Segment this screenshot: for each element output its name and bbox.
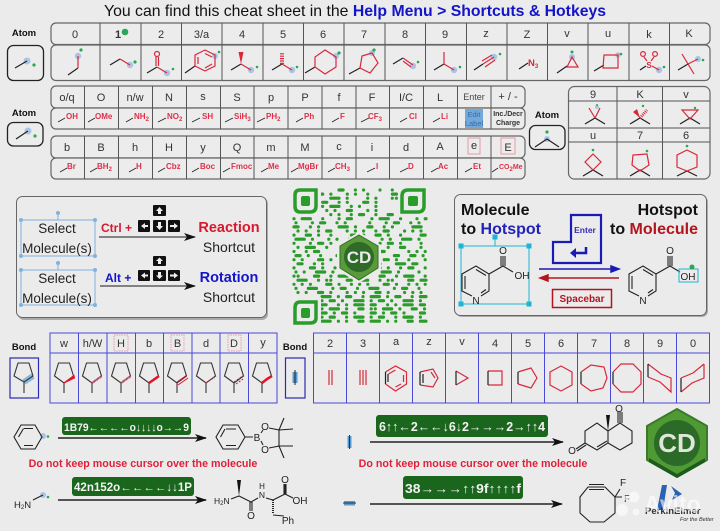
product dipeptide: O: [281, 475, 289, 486]
arrow: enter direction: [539, 266, 619, 272]
keyboard row 3: protecting groups: H: [165, 142, 173, 154]
qr finder bottom left: [295, 302, 316, 323]
selection box 1: Molecule(s): [22, 241, 92, 256]
keyboard row 2: functional groups: N: [165, 92, 173, 104]
ring size table: 3: [360, 338, 366, 350]
icon: bond hotspot right: [286, 358, 305, 398]
heading: hotspot to molecule: Hotspot: [638, 202, 698, 219]
rotation label: Rotation: [200, 270, 258, 286]
spacebar key: Spacebar: [559, 294, 605, 305]
keyboard row 2: functional groups: 2: [179, 117, 183, 123]
keyboard row 2: functional groups: OMe: [95, 112, 113, 121]
spiro shortcuts grid: u: [590, 130, 596, 142]
keyboard row 3: protecting groups: CO: [499, 164, 510, 171]
keyboard row 3: protecting groups: H: [136, 162, 142, 171]
heading: molecule to hotspot: Molecule: [461, 202, 529, 219]
heading: hotspot to molecule: to Molecule: [610, 221, 698, 238]
spiro shortcuts grid: [568, 86, 710, 179]
title: You can find this cheat sheet in the Help Menu > Shortcuts & Hotkeys: [104, 3, 606, 20]
keyboard row 2: functional groups: Enter: [463, 92, 485, 102]
structure: key Z azide: N: [528, 58, 535, 69]
keyboard row 3: protecting groups: BH: [97, 162, 109, 171]
ring size table: [314, 333, 710, 403]
bond type table: H: [117, 338, 125, 350]
product dipeptide: Ph: [282, 516, 294, 527]
icon: atom hotspot button row 1: [8, 46, 44, 80]
bond type table: w: [59, 338, 68, 350]
ctrl plus arrow keys: [101, 205, 180, 235]
keyboard row 2: functional groups: F: [369, 92, 376, 104]
molecule: selected nicotinic acid: O: [499, 246, 507, 257]
keyboard row 2: functional groups: NO: [167, 112, 179, 121]
structure: spiro key K: [630, 105, 650, 124]
example: amine to dipeptide: [14, 475, 308, 527]
keyboard row 2: functional groups: + / -: [498, 91, 518, 103]
ring size table: 9: [657, 338, 663, 350]
key sequence 1: 1B79←←←←o↓↓↓↓o→→9: [64, 422, 189, 434]
arrow 1: [58, 437, 206, 439]
bond type table: b: [146, 338, 152, 350]
structure: key Z azide: [519, 58, 539, 70]
structure: key Z azide: 3: [535, 64, 539, 70]
keyboard row 1: ring and chain shortcuts: z: [483, 28, 489, 40]
key sequence 3: 6↑↑←2←←↓6↓2→→→2→↑↑4: [379, 419, 546, 434]
reaction label: Shortcut: [203, 239, 255, 255]
keyboard row 2: functional groups: Li: [441, 112, 448, 121]
product dipeptide: N: [223, 496, 230, 506]
keyboard row 2: functional groups: I/C: [399, 92, 413, 104]
keyboard row 3: protecting groups: e: [471, 140, 477, 152]
starting material amine: N: [24, 500, 31, 511]
product difluoro cyclooctyne: F: [620, 478, 626, 489]
qr finder top left: [295, 190, 316, 212]
structure: key 1 propyl: [110, 59, 137, 68]
icon: atom hotspot button row 2: [8, 122, 43, 146]
keyboard row 1: ring and chain shortcuts: 1: [115, 29, 121, 41]
example: phenyl to boronate: [14, 417, 293, 458]
ring size table: 6: [558, 338, 564, 350]
perkinelmer logo: [645, 485, 715, 523]
molecule: selected nicotinic acid: N: [472, 296, 480, 307]
bond type table: D: [230, 338, 238, 350]
keyboard row 3: protecting groups: m: [266, 142, 276, 154]
selection box 1: Select: [38, 221, 76, 236]
ring size table: 0: [690, 338, 696, 350]
product pinacol boronate: O: [261, 445, 269, 456]
keyboard row 2: functional groups: n/w: [126, 92, 144, 104]
keyboard row 2: functional groups: F: [340, 112, 345, 121]
icon: bond hotspot left: [10, 358, 38, 398]
structure: key 4 wedge: [231, 52, 258, 73]
ring size table: z: [426, 336, 432, 348]
bond start icon: [348, 435, 352, 449]
keyboard row 2: functional groups: SiH: [234, 112, 247, 121]
ring icons: [329, 364, 704, 392]
panel: reaction and rotation shortcuts: [16, 196, 268, 320]
keyboard row 1: ring and chain shortcuts: K: [685, 28, 693, 40]
bond style marks: [64, 375, 272, 385]
reaction label: [198, 220, 260, 255]
alt plus arrow keys: Alt +: [105, 271, 131, 285]
keyboard row 3: protecting groups: [51, 136, 525, 179]
chemdraw logo: CD: [658, 428, 696, 458]
key sequence 4: [403, 476, 523, 499]
selection box 2: Molecule(s): [22, 291, 92, 306]
keyboard row 2: functional groups: SH: [202, 112, 213, 121]
molecule: nicotinic acid with hotspot: [629, 246, 698, 307]
keyboard row 2: functional groups: O: [97, 92, 106, 104]
keyboard row 1: ring and chain shortcuts: Z: [524, 29, 531, 41]
keyboard row 1: ring and chain shortcuts: k: [646, 29, 652, 41]
keyboard row 2: functional groups: 2: [277, 117, 281, 123]
key sequence 3: [376, 415, 548, 437]
spiro shortcuts grid: v: [683, 89, 689, 101]
keyboard row 1: ring and chain shortcuts: 6: [320, 29, 326, 41]
icon: atom hotspot button right: [530, 126, 565, 150]
qr center cd logo: CD: [347, 248, 371, 267]
structure: spiro key 6: [677, 145, 697, 176]
keyboard row 2: functional groups: L: [437, 92, 443, 104]
structure: key z alkyne: [474, 53, 501, 70]
qr code: [290, 186, 429, 327]
structure: key 9 isopropyl: [434, 52, 461, 73]
key sequence 4: 38→→→↑↑9f↑↑↑↑f: [405, 481, 522, 496]
selection box 1: [19, 211, 97, 258]
product difluoro cyclooctyne: F: [624, 494, 630, 505]
keyboard row 1: ring and chain shortcuts: u: [605, 28, 611, 40]
product dipeptide: H: [259, 482, 265, 491]
ctrl plus arrow keys: Ctrl +: [101, 221, 132, 235]
keyboard row 3: protecting groups: c: [336, 141, 342, 153]
ring size table: a: [393, 336, 400, 348]
keyboard row 2: functional groups: CF: [368, 112, 379, 121]
icon: enter key: [553, 215, 601, 263]
keyboard row 3: protecting groups: A: [436, 141, 444, 153]
key sequence 2: 42n152o←←←←↓↓1P: [74, 482, 192, 494]
arrow: reaction: [99, 236, 195, 238]
keyboard row 2: functional groups: NH: [134, 112, 146, 121]
structure: key K tert-butyl: [678, 54, 704, 74]
product bicyclic enone: O: [568, 446, 576, 457]
charge key: Charge: [496, 120, 520, 127]
chemdraw logo: [647, 409, 707, 478]
keyboard row 3: protecting groups: 2: [109, 167, 113, 173]
keyboard row 1: ring and chain shortcuts: v: [564, 28, 570, 40]
keyboard row 3: protecting groups: B: [97, 142, 105, 154]
spiro shortcuts grid: K: [636, 89, 644, 101]
keyboard row 1: ring and chain shortcuts: 3/a: [194, 29, 210, 41]
molecule: nicotinic acid with hotspot: O: [666, 246, 674, 257]
rotation label: [200, 270, 258, 305]
keyboard row 3: protecting groups: D: [408, 162, 414, 171]
keyboard row 3: protecting groups: h: [132, 142, 138, 154]
heading: molecule to hotspot: to Hotspot: [461, 221, 541, 238]
bond type table: B: [174, 338, 181, 350]
product bicyclic enone: [568, 404, 632, 457]
arrow: spacebar direction: [540, 275, 619, 281]
keyboard row 3: protecting groups: CH: [335, 162, 347, 171]
structure: key 8 vinyl: [393, 58, 419, 69]
product dipeptide: 2: [220, 501, 224, 507]
structure: key 3 phenyl: [185, 50, 220, 73]
structure: spiro key 9: [585, 104, 605, 124]
spiro shortcuts grid: 6: [683, 130, 689, 142]
atom label: row 2: Atom: [12, 108, 36, 119]
bond type table: h/W: [83, 338, 103, 350]
keyboard row 2: functional groups: Cl: [409, 112, 417, 121]
keyboard row 2: functional groups: f: [337, 92, 341, 104]
keyboard row 1: ring and chain shortcuts: 4: [239, 29, 245, 41]
keyboard row 1: ring and chain shortcuts: 9: [442, 29, 448, 41]
keyboard row 3: protecting groups: Fmoc: [231, 162, 253, 171]
keyboard row 3: protecting groups: Me: [268, 162, 280, 171]
icon: enter key: Enter: [574, 225, 597, 235]
atom label: right grid: Atom: [535, 110, 559, 121]
keyboard row 2: functional groups: P: [301, 92, 309, 104]
structure: key k sulfonyl: S: [646, 61, 652, 70]
arrow: rotation: [100, 285, 195, 287]
structure: spiro key u: [583, 149, 603, 176]
product difluoro cyclooctyne: [580, 478, 630, 522]
starting material amine: H: [14, 500, 21, 511]
panel: molecule to hotspot: [454, 194, 708, 317]
structure: key 0 ethyl: [68, 48, 83, 75]
warning text left: Do not keep mouse cursor over the molecule: [29, 458, 257, 470]
structure: key 6 cyclohexyl: [305, 50, 341, 74]
spiro shortcuts grid: 9: [590, 89, 596, 101]
ring size table: 5: [525, 338, 531, 350]
keyboard row 3: protecting groups: Me: [513, 164, 523, 171]
molecule: nicotinic acid with hotspot: OH: [680, 272, 696, 283]
edit label key: Label: [465, 119, 484, 128]
keyboard row 3: protecting groups: I: [376, 162, 378, 171]
keyboard row 3: protecting groups: Q: [233, 142, 242, 154]
qr center cd logo: [337, 232, 381, 283]
structure: key 2 acyl: [147, 52, 174, 76]
starting material amine: [14, 492, 49, 511]
keyboard row 2: functional groups: o/q: [59, 92, 75, 104]
arrow 3: [370, 441, 563, 443]
charge key: Inc./Decr: [493, 111, 523, 118]
product dipeptide: [214, 475, 308, 527]
keyboard row 3: protecting groups: Et: [473, 162, 481, 171]
watermark: avito: Avito: [644, 491, 701, 517]
ring size table: 8: [624, 338, 630, 350]
bond start icon: [343, 501, 356, 506]
reaction label: Reaction: [198, 220, 260, 236]
arrow 4: [370, 503, 562, 505]
keyboard row 2: functional groups: 3: [247, 117, 251, 123]
keyboard row 3: protecting groups: Cbz: [166, 162, 181, 171]
spacebar key: [552, 290, 612, 308]
keyboard row 2: functional groups: PH: [266, 112, 277, 121]
structure: key 5 hash: [272, 52, 298, 73]
product bicyclic enone: O: [615, 404, 623, 415]
keyboard row 2: functional groups: p: [268, 92, 274, 104]
edit label key: [465, 109, 484, 128]
keyboard row 3: protecting groups: Br: [67, 162, 76, 171]
keyboard row 3: protecting groups: y: [200, 142, 206, 154]
perkinelmer logo: PerkinElmer: [645, 506, 701, 517]
keyboard row 1: ring and chain shortcuts: [51, 23, 710, 80]
keyboard row 3: protecting groups: b: [64, 142, 70, 154]
product dipeptide: OH: [292, 496, 308, 507]
keyboard row 3: protecting groups: E: [504, 142, 512, 154]
keyboard row 2: functional groups: 3: [379, 117, 383, 123]
spiro shortcuts grid: 7: [637, 130, 643, 142]
perkinelmer logo: For the Better: [680, 517, 715, 523]
keyboard row 1: ring and chain shortcuts: 7: [361, 29, 367, 41]
product dipeptide: N: [259, 490, 265, 500]
selection box 2: [19, 261, 97, 307]
keyboard row 3: protecting groups: 2: [510, 167, 514, 173]
rotation label: Shortcut: [203, 289, 255, 305]
structure: key v cyclopropyl: [557, 50, 578, 73]
ring size table: v: [459, 336, 465, 348]
bond type table: y: [260, 337, 266, 349]
product dipeptide: H: [214, 496, 220, 506]
bond type table: d: [203, 338, 209, 350]
keyboard row 3: protecting groups: M: [300, 142, 310, 154]
example: bond to bicyclic enone: [348, 404, 632, 457]
qr finder top right: [402, 190, 424, 212]
keyboard row 3: protecting groups: 3: [347, 167, 351, 173]
molecule: selected nicotinic acid: [458, 234, 532, 307]
keyboard row 3: protecting groups: Ac: [438, 162, 449, 171]
warning text right: Do not keep mouse cursor over the molecule: [359, 458, 587, 470]
bond label left: Bond: [12, 342, 36, 353]
bond label right: Bond: [283, 342, 307, 353]
structure: key k sulfonyl: [640, 52, 665, 73]
keyboard row 1: ring and chain shortcuts: 2: [158, 29, 164, 41]
keyboard row 3: protecting groups: MgBr: [298, 162, 318, 171]
keyboard row 2: functional groups: S: [233, 92, 241, 104]
key sequence 1: [62, 417, 191, 435]
product pinacol boronate: B: [254, 433, 261, 444]
keyboard row 1: ring and chain shortcuts: 8: [402, 29, 408, 41]
structure: spiro key v: [680, 107, 700, 124]
edit label key: Edit: [468, 110, 481, 119]
atom label: row 1: Atom: [12, 28, 36, 39]
keyboard row 2: functional groups: s: [200, 91, 206, 103]
alt plus arrow keys: [105, 256, 180, 285]
keyboard row 3: protecting groups: d: [403, 142, 409, 154]
keyboard row 1: ring and chain shortcuts: 5: [280, 29, 286, 41]
ring size table: 2: [327, 338, 333, 350]
keyboard row 2: functional groups: Ph: [304, 112, 314, 121]
watermark: avito: [616, 491, 701, 517]
example: bond to cyclooctyne: [343, 476, 630, 522]
product dipeptide: O: [247, 511, 255, 522]
product pinacol boronate: O: [261, 422, 269, 433]
molecule: selected nicotinic acid: OH: [514, 271, 530, 282]
keyboard row 2: functional groups: OH: [66, 112, 78, 121]
key sequence 2: [72, 477, 194, 496]
starting material benzene: [14, 425, 49, 449]
molecule: nicotinic acid with hotspot: N: [639, 296, 647, 307]
arrow 2: [58, 499, 206, 501]
keyboard row 3: protecting groups: Boc: [200, 162, 216, 171]
structure: spiro key 7: [630, 150, 650, 176]
ring size table: 7: [591, 338, 597, 350]
bond type table: [50, 333, 277, 403]
keyboard row 2: functional groups: 2: [146, 117, 150, 123]
ring size table: 4: [492, 338, 498, 350]
structure: key u cyclobutyl: [594, 52, 622, 71]
keyboard row 3: protecting groups: i: [371, 142, 373, 154]
keyboard row 2: functional groups: [51, 86, 525, 129]
charge key: [493, 111, 523, 127]
keyboard row 1: ring and chain shortcuts: 0: [72, 29, 78, 41]
starting material amine: 2: [21, 505, 25, 511]
selection box 2: Select: [38, 271, 76, 286]
structure: key 7 cyclopentyl: [349, 48, 378, 74]
product pinacol boronate: [216, 418, 293, 458]
